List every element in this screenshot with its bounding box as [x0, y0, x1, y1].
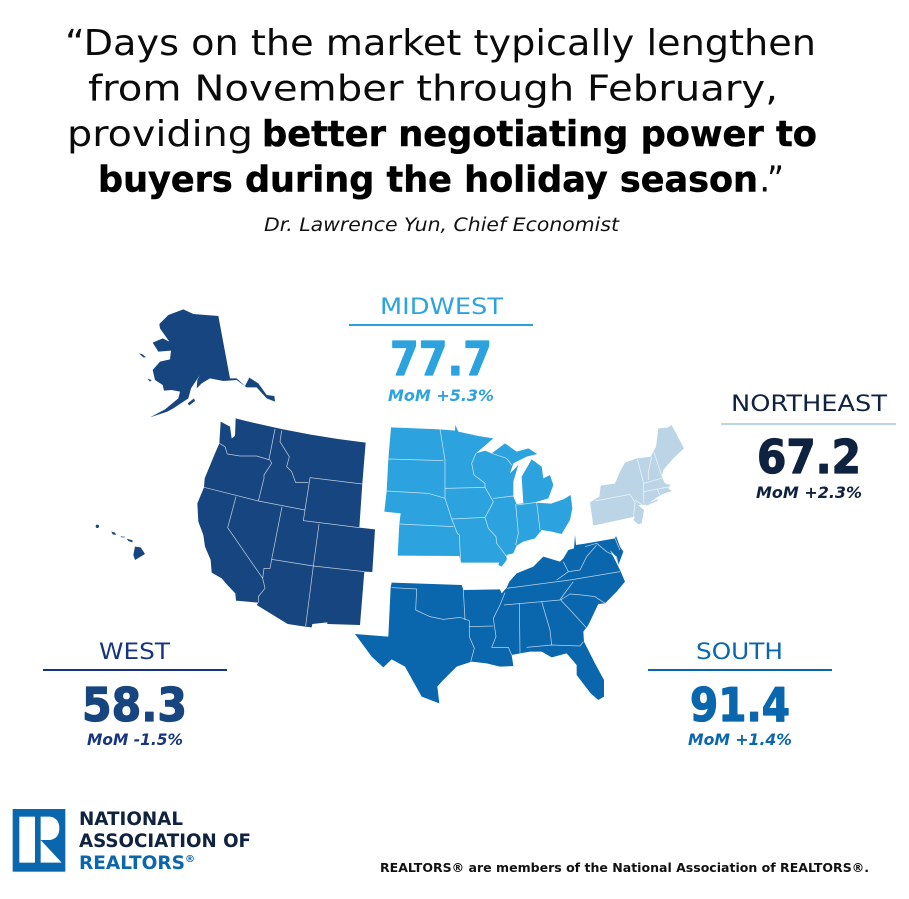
callout: South	[648, 640, 832, 749]
callout: West: 58.3	[82, 678, 187, 732]
callout: Midwest	[349, 295, 533, 405]
title: quote: providing	[67, 114, 253, 155]
logo: National Association of Realtors: ASSOCIATION OF	[79, 831, 251, 852]
title: quote: better negotiating power to	[262, 114, 817, 155]
Hawaii	[96, 525, 145, 560]
map: Northeast region	[590, 425, 684, 526]
title: quote: “Days on the market typically lengthen	[65, 23, 816, 64]
callout: Northeast	[721, 392, 896, 502]
logo: National Association of Realtors: REALTORS	[79, 853, 185, 874]
contiguous West states	[197, 418, 375, 627]
callout: Northeast: NORTHEAST	[731, 392, 888, 417]
callout: South: MoM +1.4%	[688, 730, 792, 749]
callout: Northeast: MoM +2.3%	[756, 483, 862, 502]
map: West region with Alaska and Hawaii	[96, 309, 375, 627]
map: South region	[355, 535, 625, 703]
logo: National Association of Realtors: NATIONAL	[79, 809, 183, 830]
Alaska	[139, 309, 275, 417]
callout: West	[43, 640, 227, 749]
callout: Midwest: MIDWEST	[380, 295, 504, 320]
title: quote	[65, 23, 817, 200]
callout: West: MoM -1.5%	[87, 730, 183, 749]
attribution text: Dr. Lawrence Yun, Chief Economist	[264, 215, 620, 236]
logo: National Association of Realtors: ®	[185, 854, 195, 865]
callout: West: WEST	[99, 640, 171, 665]
icon: R block	[13, 809, 65, 872]
title: quote: ”	[767, 160, 784, 200]
title: quote: buyers during the holiday season	[98, 160, 758, 200]
title: quote: .	[759, 160, 770, 200]
map: Midwest region	[384, 425, 572, 567]
callout: Northeast: 67.2	[757, 430, 861, 484]
callout: Midwest: MoM +5.3%	[388, 386, 494, 405]
title: quote: from November through February,	[88, 68, 778, 110]
callout: Midwest: 77.7	[390, 332, 492, 386]
footer disclaimer: REALTORS® are members of the National Association of REALTORS®.	[380, 860, 869, 875]
callout: South: 91.4	[690, 678, 790, 732]
callout: South: SOUTH	[696, 640, 783, 665]
logo: National Association of Realtors	[13, 809, 251, 874]
